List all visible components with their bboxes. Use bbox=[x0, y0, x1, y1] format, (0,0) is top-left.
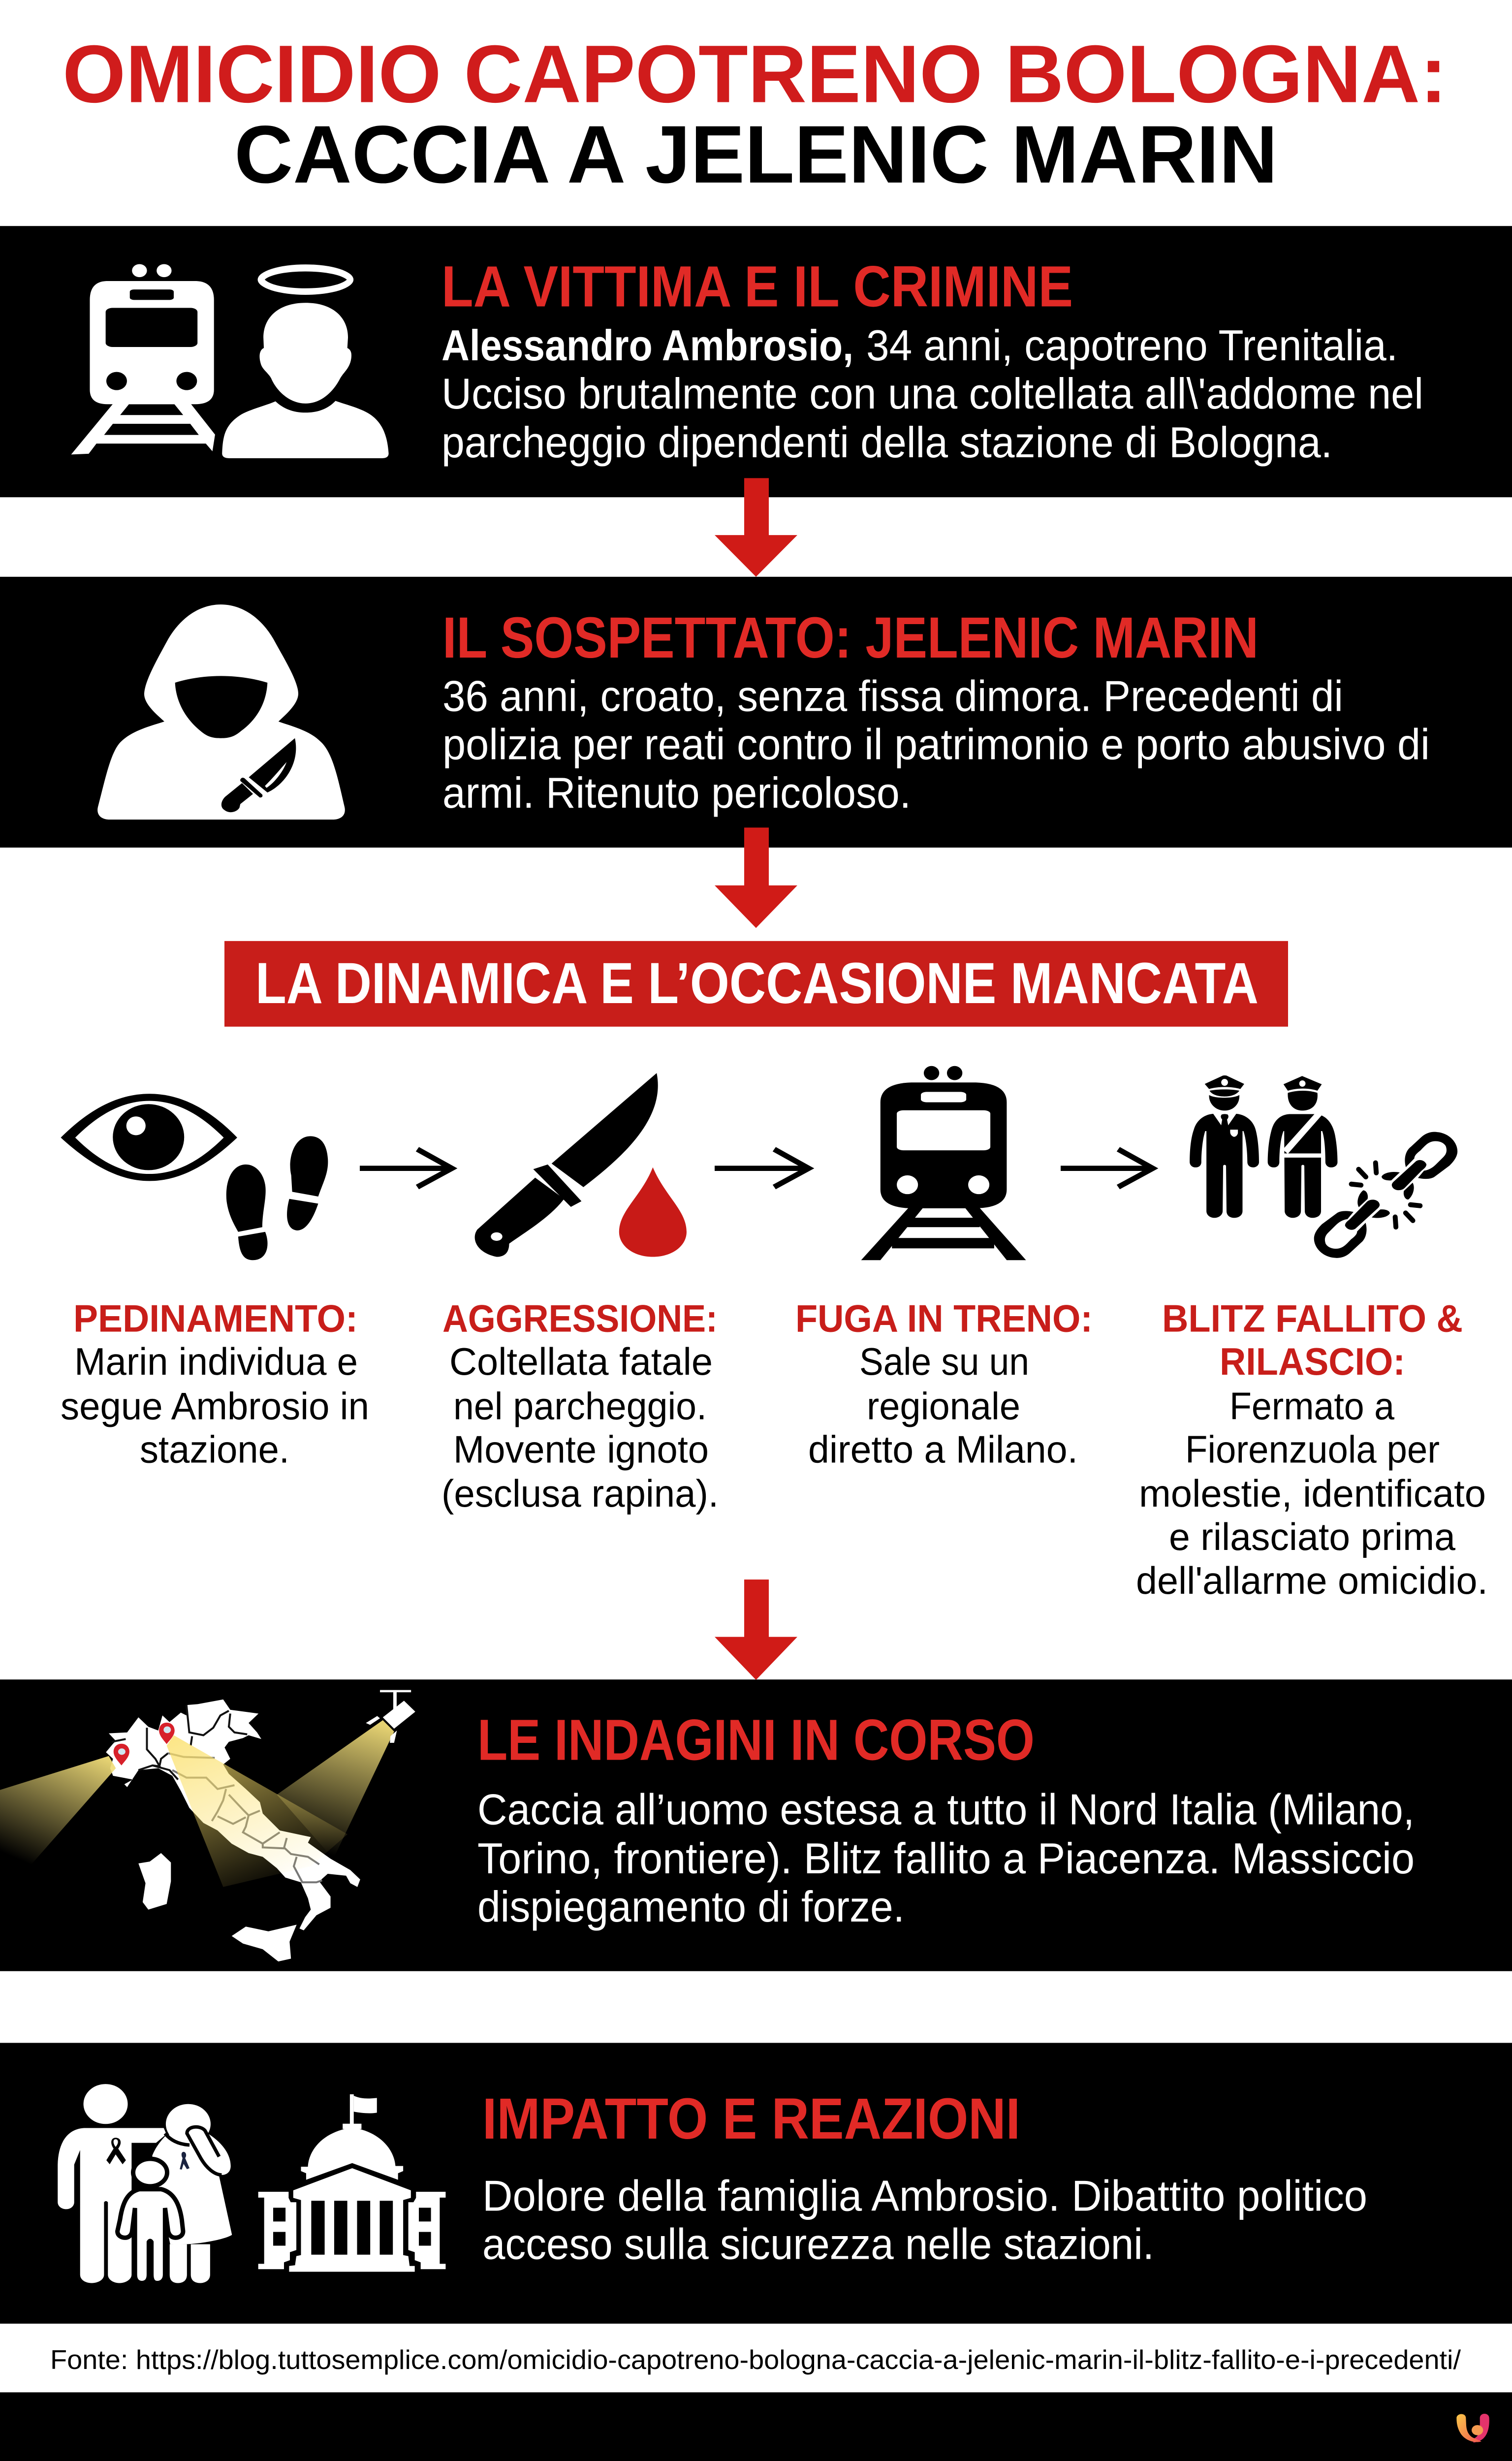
section banner bbox=[224, 941, 1288, 1027]
step 2: aggressione: AGGRESSIONE: bbox=[442, 1297, 718, 1340]
body text bbox=[442, 672, 1430, 817]
icon: map of Italy with spotlights bbox=[0, 1690, 415, 1961]
step 4: blitz fallito e rilascio: BLITZ FALLITO & bbox=[1162, 1297, 1463, 1340]
panel: le indagini in corso bbox=[0, 1679, 1512, 1971]
arrow: suspect to dynamics bbox=[715, 827, 797, 928]
icon: government building bbox=[258, 2094, 445, 2272]
arrow: victim to suspect bbox=[715, 478, 797, 577]
body text: 36 anni, croato, senza fissa dimora. Precedenti di bbox=[442, 672, 1343, 720]
step 3: fuga in treno: regionale bbox=[867, 1385, 1020, 1427]
step 1: pedinamento: segue Ambrosio in bbox=[61, 1385, 369, 1427]
body text: parcheggio dipendenti della stazione di Bologna. bbox=[441, 418, 1332, 467]
body text: 34 anni, capotreno Trenitalia. bbox=[866, 321, 1398, 370]
step 2: aggressione: nel parcheggio. bbox=[453, 1385, 707, 1427]
heading: LE INDAGINI IN CORSO bbox=[477, 1707, 1035, 1772]
step 3: fuga in treno: diretto a Milano. bbox=[808, 1428, 1078, 1471]
panel: impatto e reazioni bbox=[0, 2043, 1512, 2324]
step 2: aggressione: (esclusa rapina). bbox=[441, 1472, 719, 1515]
step 2: aggressione bbox=[441, 1297, 719, 1515]
step 4: blitz fallito e rilascio: Fermato a bbox=[1229, 1385, 1395, 1427]
icon: train and victim bbox=[71, 264, 389, 458]
arrow: step 2 to 3 bbox=[715, 1149, 809, 1187]
icon: logo bbox=[1456, 2414, 1489, 2442]
step 2: aggressione: Coltellata fatale bbox=[449, 1340, 713, 1383]
body text bbox=[441, 321, 1423, 467]
arrow: dynamics to investigations bbox=[715, 1579, 797, 1680]
body text: armi. Ritenuto pericoloso. bbox=[442, 768, 911, 817]
icon: knife and blood drop bbox=[475, 1073, 687, 1257]
step 4: blitz fallito e rilascio: RILASCIO: bbox=[1220, 1340, 1405, 1383]
heading: IMPATTO E REAZIONI bbox=[482, 2086, 1020, 2151]
icon: grieving family bbox=[58, 2084, 232, 2283]
heading: LA VITTIMA E IL CRIMINE bbox=[441, 254, 1073, 319]
body text: acceso sulla sicurezza nelle stazioni. bbox=[482, 2220, 1154, 2268]
body text bbox=[477, 1785, 1415, 1931]
title bbox=[63, 28, 1447, 200]
panel: la vittima e il crimine bbox=[0, 226, 1512, 497]
body text: Dolore della famiglia Ambrosio. Dibattito politico bbox=[482, 2172, 1367, 2220]
step 4: blitz fallito e rilascio: e rilasciato prima bbox=[1169, 1515, 1456, 1558]
icon: hooded suspect with knife bbox=[97, 604, 345, 820]
title: CACCIA A JELENIC MARIN bbox=[234, 108, 1278, 200]
step 2: aggressione: Movente ignoto bbox=[453, 1428, 709, 1471]
step 4: blitz fallito e rilascio bbox=[1136, 1297, 1488, 1602]
panel: il sospettato bbox=[0, 577, 1512, 848]
body text bbox=[482, 2172, 1367, 2268]
arrow: step 3 to 4 bbox=[1061, 1149, 1153, 1187]
step 1: pedinamento bbox=[61, 1297, 369, 1471]
step 1: pedinamento: PEDINAMENTO: bbox=[73, 1297, 358, 1340]
icon: police officers and broken chain bbox=[1190, 1075, 1457, 1258]
step 3: fuga in treno bbox=[795, 1297, 1093, 1471]
footer bar bbox=[0, 2392, 1512, 2461]
step 1: pedinamento: stazione. bbox=[140, 1428, 289, 1471]
icon: eye and footprints bbox=[61, 1094, 328, 1260]
step 3: fuga in treno: Sale su un bbox=[859, 1340, 1029, 1383]
step 4: blitz fallito e rilascio: Fiorenzuola per bbox=[1185, 1428, 1440, 1471]
step 1: pedinamento: Marin individua e bbox=[74, 1340, 358, 1383]
icon: train bbox=[861, 1066, 1026, 1260]
heading: IL SOSPETTATO: JELENIC MARIN bbox=[442, 605, 1259, 670]
arrow: step 1 to 2 bbox=[360, 1149, 452, 1187]
body text: dispiegamento di forze. bbox=[477, 1883, 905, 1931]
step 3: fuga in treno: FUGA IN TRENO: bbox=[795, 1297, 1093, 1340]
body text: Alessandro Ambrosio, bbox=[441, 321, 853, 370]
